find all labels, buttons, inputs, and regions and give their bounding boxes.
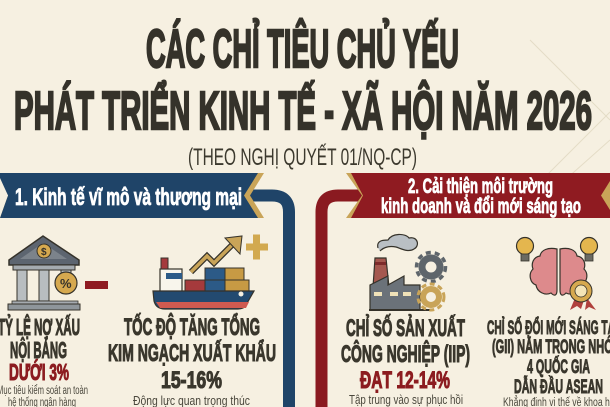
stat: nợ xấu: Mục tiêu kiểm soát an toàn bbox=[0, 385, 88, 397]
icon: plus sign bbox=[246, 234, 268, 260]
stat: xuất khẩu: KIM NGẠCH XUẤT KHẨU bbox=[108, 339, 276, 367]
stat: xuất khẩu: TỐC ĐỘ TĂNG TỔNG bbox=[124, 313, 260, 341]
stat: xuất khẩu bbox=[108, 313, 276, 407]
icon: minus sign bbox=[85, 281, 108, 289]
icon: bank bbox=[8, 236, 80, 310]
stat: đổi mới sáng tạo bbox=[487, 317, 610, 407]
icon: factory bbox=[369, 234, 446, 311]
stat: iip: CHỈ SỐ SẢN XUẤT bbox=[346, 313, 465, 342]
stat: nợ xấu bbox=[0, 312, 88, 407]
icon: cargo ship bbox=[153, 236, 254, 309]
stat: xuất khẩu: 15-16% bbox=[161, 367, 222, 394]
stat: iip: CÔNG NGHIỆP (IIP) bbox=[341, 340, 470, 368]
icon: brain with bulbs and medal bbox=[516, 238, 598, 310]
stat: nợ xấu: DƯỚI 3% bbox=[9, 358, 69, 385]
banner 2 bbox=[346, 173, 610, 218]
banner 1: 1. Kinh tế vĩ mô và thương mại bbox=[15, 184, 242, 211]
panel: connector line red bbox=[322, 196, 362, 407]
subtitle: (THEO NGHỊ QUYẾT 01/NQ-CP) bbox=[188, 143, 417, 171]
panel: connector line blue bbox=[250, 196, 289, 407]
stat: nợ xấu: TỶ LỆ NỢ XẤU bbox=[0, 312, 80, 340]
icon: bank: % bbox=[60, 276, 72, 291]
stat: iip bbox=[341, 313, 470, 407]
icon: bank: $ bbox=[41, 247, 47, 258]
title bbox=[14, 18, 592, 141]
stat: iip: ĐẠT 12-14% bbox=[360, 367, 450, 394]
stat: nợ xấu: NỘI BẢNG bbox=[10, 335, 67, 363]
banner 1 bbox=[0, 173, 264, 218]
stat: iip: Tập trung vào sự phục hồi bbox=[349, 392, 463, 407]
